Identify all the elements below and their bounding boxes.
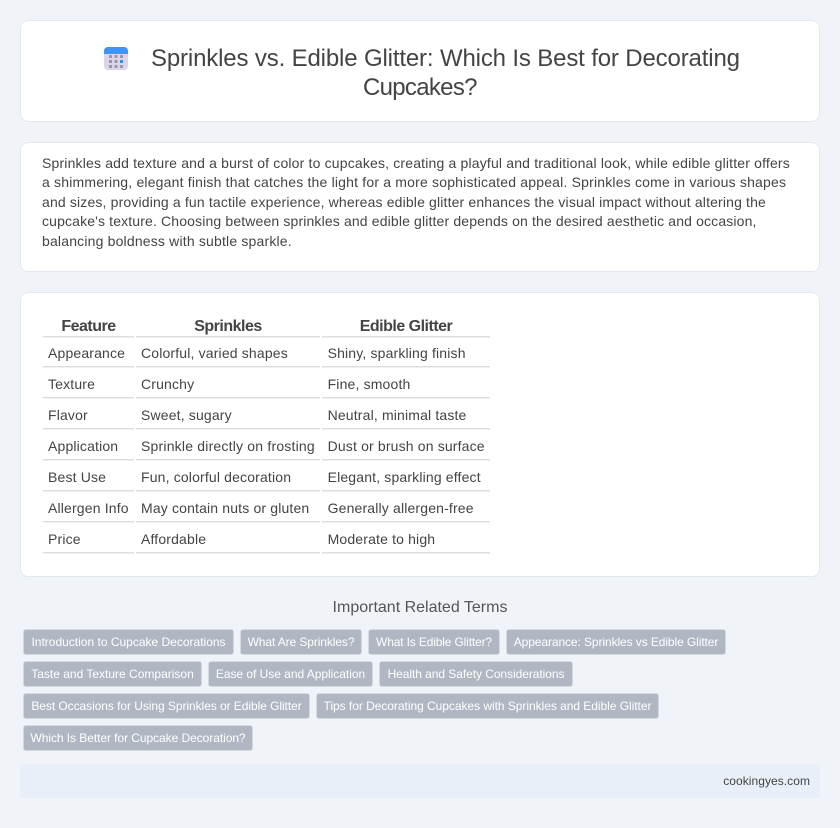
row: application: Application [48, 438, 118, 454]
row: appearance: Shiny, sparkling finish [328, 345, 466, 361]
row: price: Affordable [141, 531, 206, 547]
tag list: Introduction to Cupcake Decorations [31, 635, 226, 649]
row: allergen info [43, 500, 490, 523]
row: texture: Fine, smooth [328, 376, 410, 392]
row: price [43, 531, 490, 554]
row: allergen info: Generally allergen-free [328, 500, 474, 516]
row: best use [43, 469, 490, 492]
row: flavor: Neutral, minimal taste [328, 407, 466, 423]
tag list: Tips for Decorating Cupcakes with Sprinkles and Edible Glitter [324, 699, 651, 713]
row: texture: Texture [48, 376, 95, 392]
tag list: What Is Edible Glitter? [376, 635, 492, 649]
title [151, 45, 740, 101]
intro paragraph [42, 155, 790, 249]
row: application: Sprinkle directly on frosting [141, 438, 315, 454]
title: Cupcakes? [363, 74, 477, 101]
row: allergen info: May contain nuts or gluten [141, 500, 309, 516]
intro paragraph: Sprinkles add texture and a burst of color to cupcakes, creating a playful and traditional look, while edible glitter offers [42, 155, 790, 171]
intro paragraph: and sizes, providing a fun tactile experience, whereas edible glitter enhances the visual impact without altering the [42, 194, 766, 210]
row: best use: Elegant, sparkling effect [328, 469, 481, 485]
row: appearance: Colorful, varied shapes [141, 345, 288, 361]
row: flavor [43, 407, 490, 430]
tag list: Taste and Texture Comparison [31, 667, 194, 681]
row: application: Dust or brush on surface [328, 438, 485, 454]
footer bar [20, 764, 820, 798]
row: flavor: Flavor [48, 407, 88, 423]
row: allergen info: Allergen Info [48, 500, 129, 516]
table header: Feature [61, 318, 116, 335]
row: best use: Best Use [48, 469, 106, 485]
intro paragraph: cupcake's texture. Choosing between sprinkles and edible glitter depends on the desired aesthetic and occasion, [42, 213, 757, 229]
table header: Sprinkles [194, 318, 262, 335]
tag list: What Are Sprinkles? [248, 635, 354, 649]
tag list [23, 629, 726, 751]
table header: Edible Glitter [360, 318, 452, 335]
row: price: Price [48, 531, 81, 547]
intro paragraph: a shimmering, elegant finish that catches the light for a more sophisticated appeal. Sprinkles come in various shapes [42, 174, 786, 190]
header panel [20, 20, 820, 122]
tag list: Ease of Use and Application [216, 667, 365, 681]
heading: related terms: Important Related Terms [333, 599, 507, 616]
title: Sprinkles vs. Edible Glitter: Which Is Best for Decorating [151, 45, 740, 72]
icon: calendar grid [104, 47, 128, 70]
tag list: Best Occasions for Using Sprinkles or Edible Glitter [31, 699, 302, 713]
table header [43, 318, 490, 338]
intro paragraph: balancing boldness with subtle sparkle. [42, 233, 292, 249]
panel: intro text [20, 142, 820, 272]
row: best use: Fun, colorful decoration [141, 469, 291, 485]
tag list: Appearance: Sprinkles vs Edible Glitter [514, 635, 718, 649]
panel: comparison table [20, 292, 820, 577]
source credit: cookingyes.com [723, 774, 810, 788]
row: appearance [43, 345, 490, 368]
row: texture [43, 376, 490, 399]
tag list: Which Is Better for Cupcake Decoration? [30, 731, 246, 745]
row: texture: Crunchy [141, 376, 194, 392]
row: application [43, 438, 490, 461]
row: price: Moderate to high [328, 531, 435, 547]
row: flavor: Sweet, sugary [141, 407, 232, 423]
tag list: Health and Safety Considerations [388, 667, 564, 681]
row: appearance: Appearance [48, 345, 125, 361]
